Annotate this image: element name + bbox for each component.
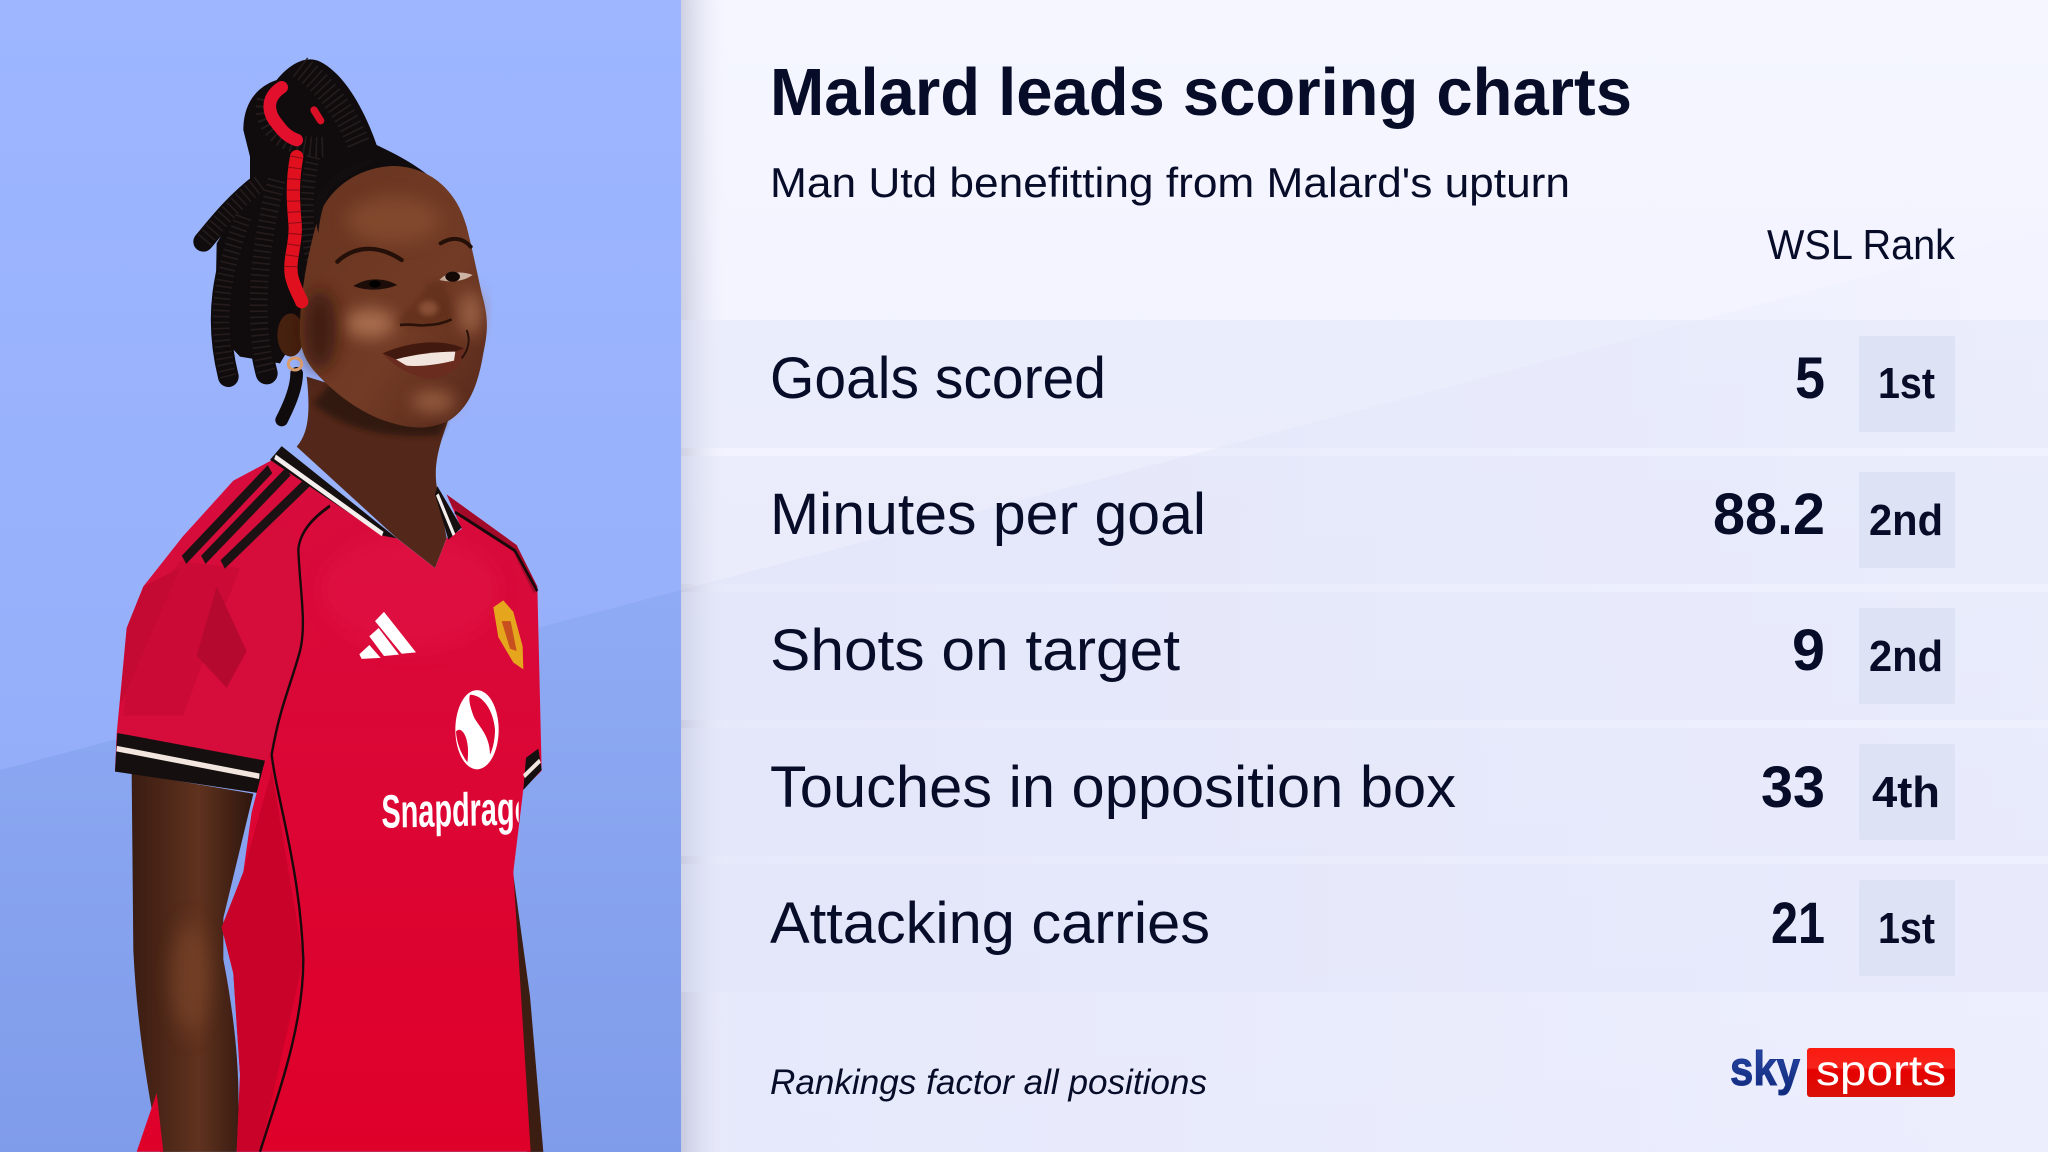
- row: Shots on target: 9: [1792, 618, 1825, 683]
- hair: [215, 59, 442, 363]
- row: Minutes per goal: Minutes per goal: [770, 482, 1206, 547]
- row: Minutes per goal: [681, 456, 2048, 584]
- row: Goals scored: Goals scored: [770, 346, 1106, 411]
- row: Goals scored: 1st: [1878, 359, 1935, 408]
- row: Touches in opposition box: Touches in opposition box: [770, 755, 1456, 820]
- hair rope texture: [203, 67, 360, 377]
- logo: Sky Sports: sports: [1816, 1047, 1946, 1095]
- panel: player photo background: [0, 0, 681, 1152]
- row: Goals scored: [681, 320, 2048, 448]
- earring: [288, 358, 302, 370]
- row: Shots on target: Shots on target: [770, 618, 1180, 683]
- photo: player Malard: [100, 59, 567, 1152]
- seams: [260, 506, 537, 1152]
- face: [300, 166, 487, 427]
- adidas logo: [359, 612, 416, 659]
- ear: [277, 313, 304, 357]
- club crest: [493, 600, 523, 669]
- neck: [297, 377, 448, 568]
- row: Attacking carries: 1st: [1878, 904, 1935, 953]
- logo: Sky Sports: sky: [1730, 1043, 1800, 1096]
- row: Attacking carries: Attacking carries: [770, 891, 1210, 956]
- row: Touches in opposition box: 4th: [1872, 768, 1940, 817]
- row: Minutes per goal: 2nd: [1869, 496, 1943, 545]
- panel edge shadow: [681, 0, 731, 1152]
- title: Malard leads scoring charts: [770, 55, 1632, 130]
- row: Shots on target: 2nd: [1869, 632, 1943, 681]
- row: Attacking carries: [681, 864, 2048, 992]
- row: Touches in opposition box: [681, 728, 2048, 856]
- row: Goals scored: 5: [1795, 346, 1825, 411]
- logo: Sky Sports: [1730, 1043, 1955, 1097]
- head: [203, 59, 487, 568]
- row: Touches in opposition box: 33: [1761, 755, 1825, 820]
- panel: stats background: [681, 0, 2048, 1152]
- sponsor wordmark: Snapdragon: [381, 781, 550, 838]
- red braids: [270, 87, 321, 302]
- arms: [132, 773, 543, 1152]
- row: Minutes per goal: 88.2: [1713, 482, 1825, 547]
- subtitle: Man Utd benefitting from Malard's upturn: [770, 159, 1570, 206]
- sponsor logo: [455, 690, 499, 769]
- hair fringe: [313, 158, 377, 233]
- column heading: WSL Rank: WSL Rank: [1767, 221, 1956, 268]
- shirt: [115, 446, 542, 1152]
- row: Attacking carries: 21: [1771, 891, 1825, 956]
- sleeve cuff: [115, 733, 542, 793]
- nose: [397, 280, 453, 326]
- row: Shots on target: [681, 592, 2048, 720]
- collar: [270, 446, 462, 540]
- eyes and brows: [337, 249, 402, 262]
- mouth: [383, 342, 464, 379]
- footnote: Rankings factor all positions: [770, 1063, 1207, 1102]
- shoulder stripes: [184, 469, 308, 564]
